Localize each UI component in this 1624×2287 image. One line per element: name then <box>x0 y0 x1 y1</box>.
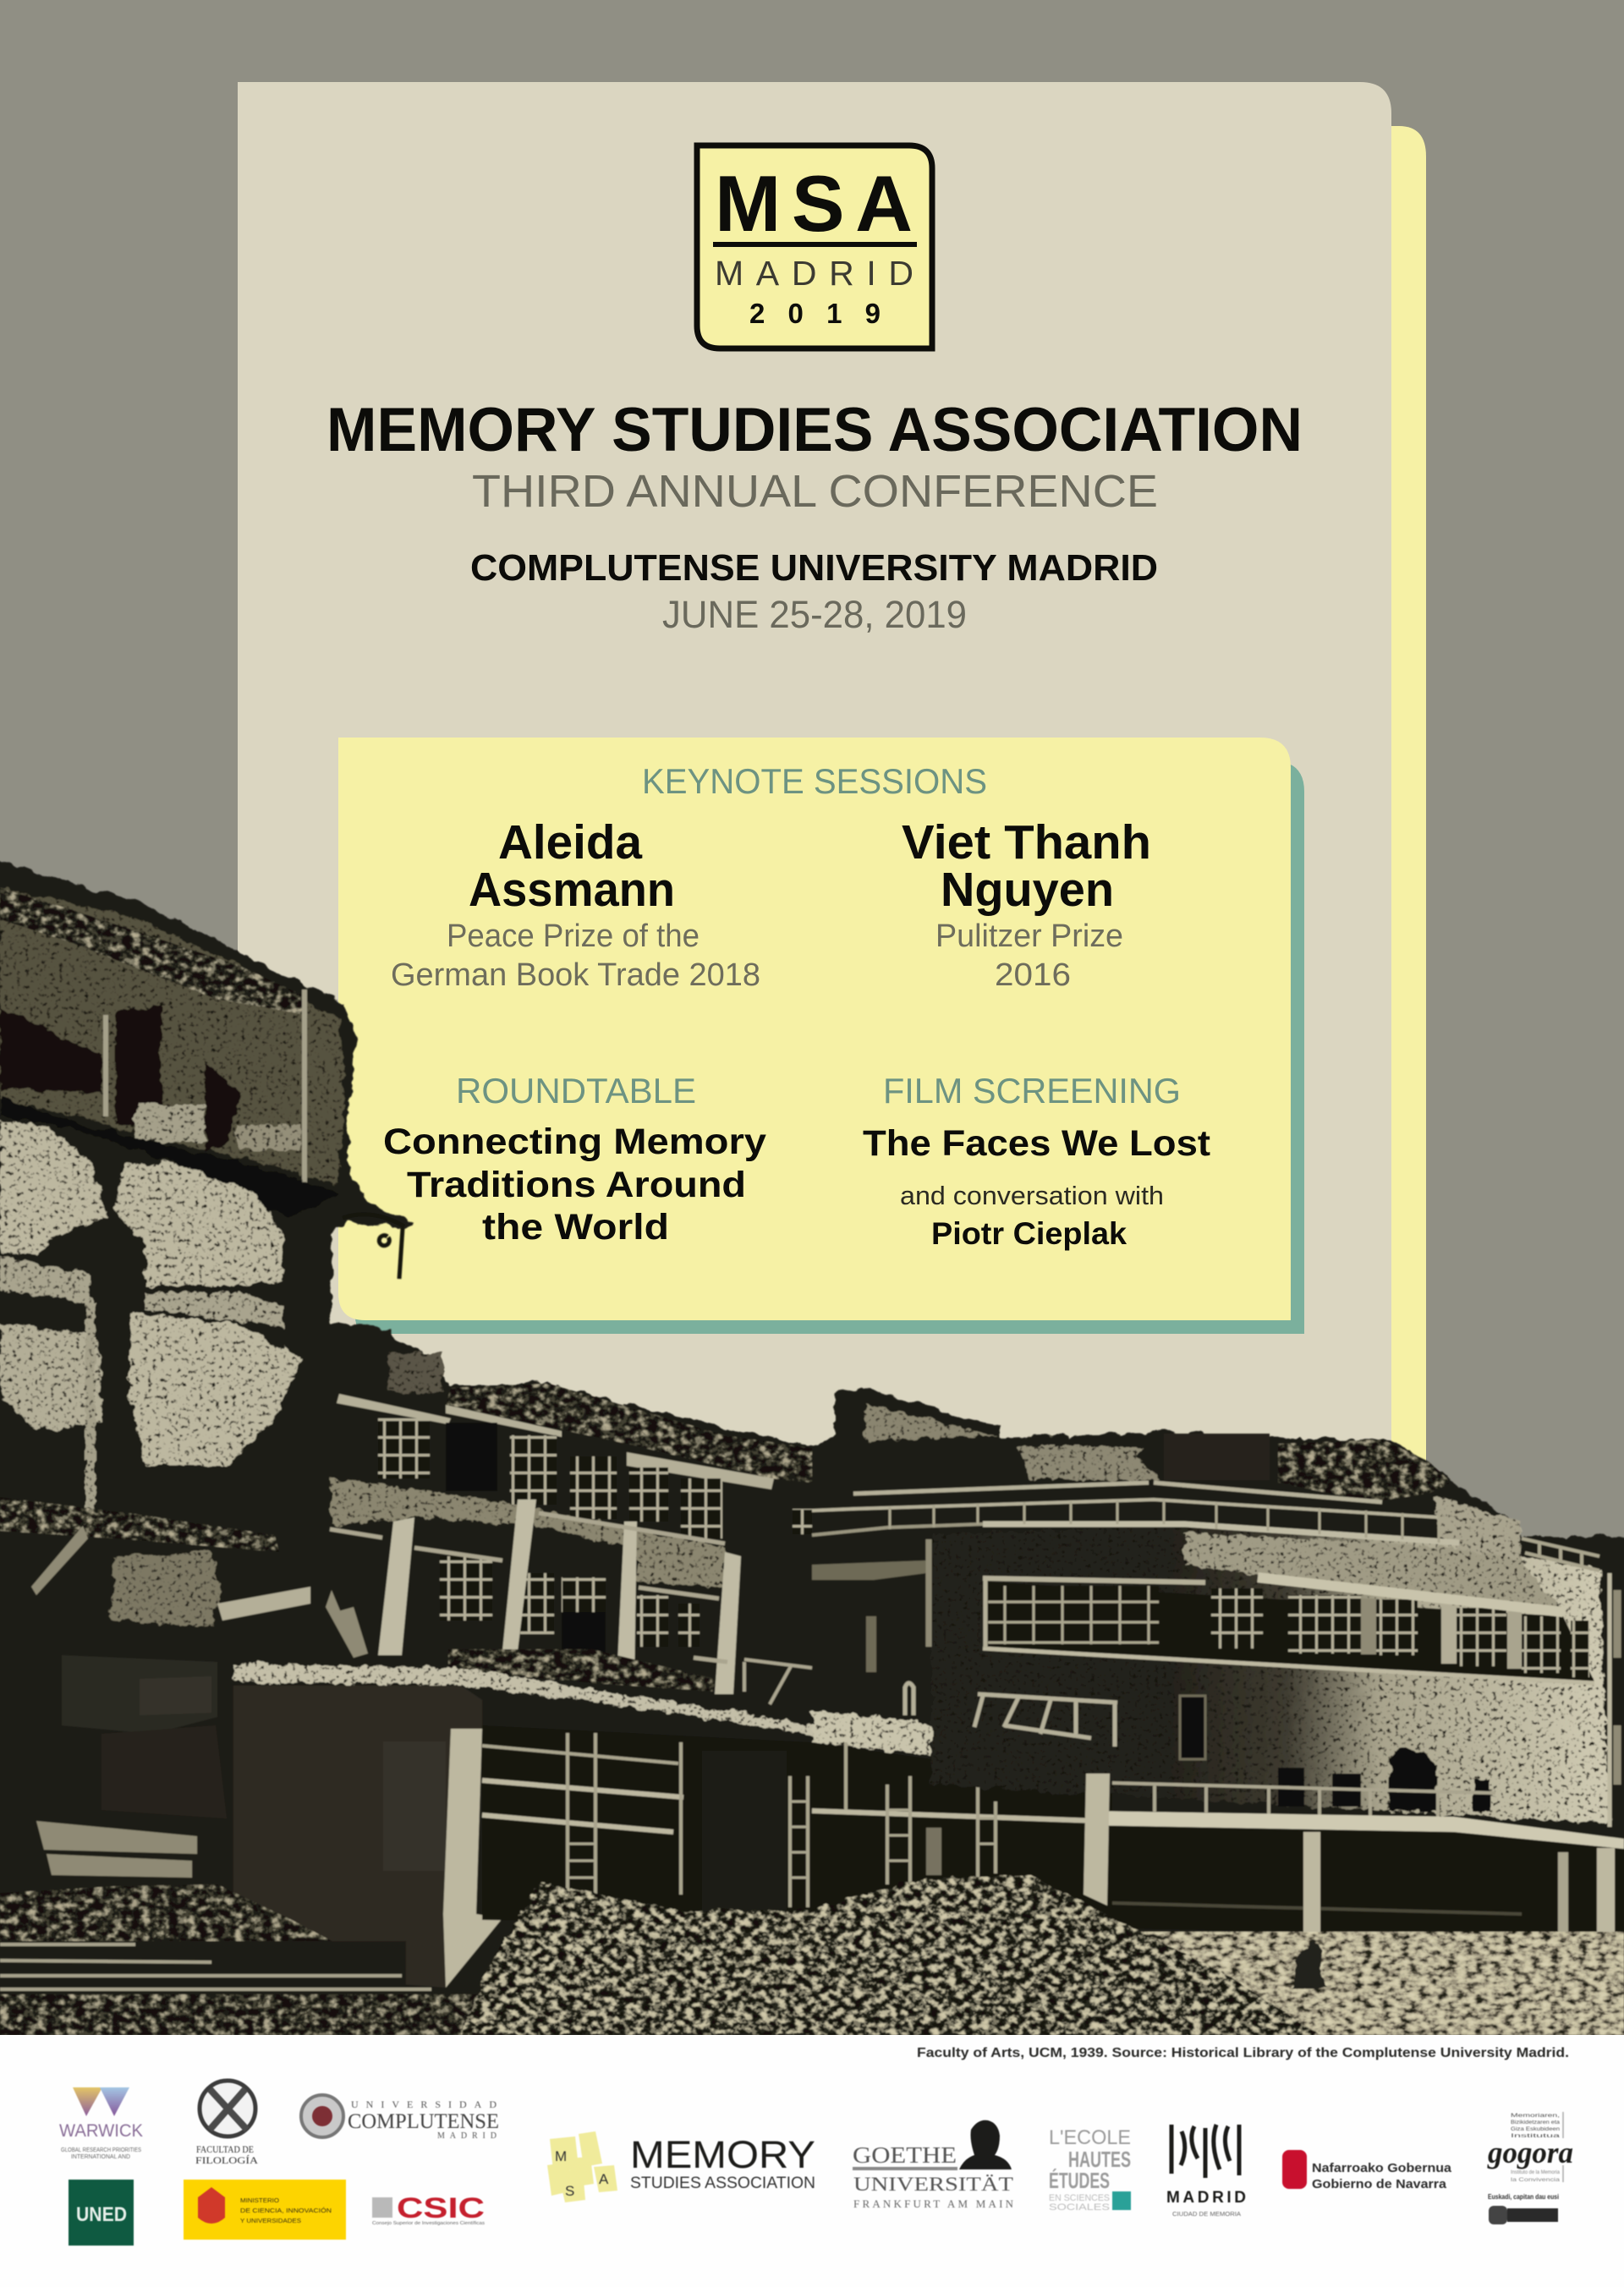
panel shadow <box>355 761 1304 1334</box>
logo: Warwick: GLOBAL RESEARCH PRIORITIES <box>61 2147 141 2153</box>
logo: Spanish ministry: Y UNIVERSIDADES <box>240 2217 301 2224</box>
photo: small rooftop railing <box>905 1683 1117 1747</box>
film screening: FILM SCREENING <box>883 1071 1181 1111</box>
logo: Gobierno de Navarra <box>1282 2150 1452 2191</box>
subtitle: THIRD ANNUAL CONFERENCE <box>472 466 1158 517</box>
logo: Spanish ministry: MINISTERIO <box>240 2197 279 2204</box>
logo: Memory Studies Association: M <box>555 2148 567 2164</box>
logo: Universidad Complutense: COMPLUTENSE <box>348 2110 499 2133</box>
photo: upper ribbon windows <box>812 1483 1617 1827</box>
speaker: Viet Thanh Nguyen: Viet Thanh <box>902 815 1151 869</box>
sticky notes <box>547 2131 617 2202</box>
photo: dark mass left of the tower <box>812 1539 929 1672</box>
yellow back tab <box>1353 126 1426 1522</box>
footer band <box>0 2035 1624 2287</box>
logo: Universidad Complutense: MADRID <box>437 2131 497 2141</box>
logo: EHESS: L'ECOLE <box>1049 2126 1131 2149</box>
film screening: and conversation with <box>900 1181 1164 1210</box>
logo: Goethe University <box>853 2120 1014 2210</box>
speaker: Viet Thanh Nguyen: Pulitzer Prize <box>935 919 1123 954</box>
main beige panel <box>238 82 1391 1607</box>
photo: left rubble mound <box>0 1884 388 1988</box>
logo: UNED <box>69 2180 134 2246</box>
film screening: The Faces We Lost <box>863 1123 1210 1164</box>
photo: roofline <box>866 1405 1519 1560</box>
photo caption: Faculty of Arts, UCM, 1939. Source: Historical Library of the Complutense University Madrid. <box>917 2046 1569 2060</box>
photo: left wing, upper storey <box>0 888 345 1218</box>
heading: keynote sessions: KEYNOTE SESSIONS <box>642 761 987 801</box>
roundtable: Traditions Around <box>407 1165 746 1205</box>
title: MEMORY STUDIES ASSOCIATION <box>326 396 1303 464</box>
MSA Madrid 2019 logo <box>697 145 932 348</box>
photo: ground floor windows and scaffold <box>482 1725 1112 1928</box>
logo: Madrid: MADRID <box>1166 2189 1246 2207</box>
logo: Memory Studies Association: A <box>599 2171 609 2187</box>
logo: Gobierno de Navarra: Gobierno de Navarra <box>1312 2178 1447 2191</box>
logo: Gogora: gogora <box>1487 2136 1573 2169</box>
logo: Madrid: CIUDAD DE MEMORIA <box>1172 2212 1241 2218</box>
logo: Memory Studies Association: MEMORY <box>630 2133 815 2176</box>
photo: canopy over ground floor <box>233 1664 1146 1772</box>
photo: ground and bushes <box>1125 1932 1624 2035</box>
photo: foreground strip <box>0 1994 508 2035</box>
logo: Facultad de Filología: FILOLOGÍA <box>195 2154 258 2166</box>
photo: stone slabs <box>36 1821 197 1878</box>
tower windows <box>988 1586 1589 1677</box>
logo: Gogora <box>1487 2112 1573 2224</box>
logo rule <box>713 242 917 247</box>
logo: Madrid <box>1166 2125 1246 2218</box>
logo: Memory Studies Association: STUDIES ASSOCIATION <box>630 2175 815 2192</box>
logo frame <box>697 145 932 348</box>
photo silhouette <box>0 856 1624 2055</box>
photo: front steps <box>0 1941 431 1996</box>
logo MSA: MSA <box>715 159 913 248</box>
goethe portrait <box>959 2120 1012 2169</box>
logo: Goethe University: GOETHE <box>853 2142 957 2168</box>
logo: CSIC: Consejo Superior de Investigaciones Científicas <box>372 2221 485 2226</box>
logo: Gogora: Bizikidetzaren eta <box>1511 2120 1560 2125</box>
speaker: Aleida Assmann <box>391 815 760 993</box>
logo: EHESS: SOCIALES <box>1049 2202 1110 2213</box>
hanging pipe <box>343 1215 404 1279</box>
dates: JUNE 25-28, 2019 <box>662 593 967 636</box>
logo: Gobierno de Navarra: Nafarroako Gobernua <box>1312 2162 1452 2175</box>
venue: COMPLUTENSE UNIVERSITY MADRID <box>470 547 1158 589</box>
logo: CSIC: CSIC <box>397 2192 485 2224</box>
speaker: Aleida Assmann: Peace Prize of the <box>447 919 700 954</box>
ministry crest <box>198 2187 225 2224</box>
tower shell holes <box>1180 1696 1490 1811</box>
logo: Gogora: Euskadi, capitan dau eusi <box>1488 2192 1559 2201</box>
logo: Facultad de Filología: FACULTAD DE <box>196 2143 254 2155</box>
photo: ruined Faculty of Arts building <box>0 856 1624 2055</box>
speaker: Aleida Assmann: Assmann <box>469 863 675 917</box>
logo year: 2019 <box>749 298 881 329</box>
logo: Universidad Complutense: UNIVERSIDAD <box>351 2098 497 2110</box>
logo: Memory Studies Association: S <box>565 2183 574 2199</box>
logo: EHESS: HAUTES <box>1068 2147 1131 2172</box>
logo: Gogora: Instituto de la Memoria <box>1511 2169 1560 2175</box>
speaker: Viet Thanh Nguyen: 2016 <box>995 957 1071 993</box>
logo: Gogora: Institutua <box>1511 2133 1561 2139</box>
logo: Spanish ministry <box>184 2180 346 2240</box>
logo: Gogora: Memoriaren, <box>1511 2113 1560 2119</box>
speaker: Aleida Assmann: Aleida <box>498 815 643 869</box>
roundtable: the World <box>482 1207 669 1248</box>
roundtable <box>383 1071 766 1248</box>
speaker: Viet Thanh Nguyen: Nguyen <box>941 863 1114 917</box>
wall piers <box>378 1500 741 1694</box>
logo: EHESS: EN SCIENCES <box>1049 2193 1110 2203</box>
photo: middle wing, two storeys of windows <box>330 1353 812 1704</box>
photo: workman <box>1292 1940 1328 1988</box>
logo: CSIC <box>372 2192 485 2226</box>
logo: Warwick: WARWICK <box>59 2121 143 2141</box>
logo: EHESS: ÉTUDES <box>1049 2168 1110 2193</box>
photo: central rubble mound <box>461 1875 1320 2035</box>
logo: UNED: UNED <box>76 2203 127 2226</box>
logo: Facultad de Filología <box>195 2081 258 2166</box>
speaker: Aleida Assmann: German Book Trade 2018 <box>391 957 760 993</box>
logo: Warwick <box>59 2087 143 2160</box>
speaker: Viet Thanh Nguyen <box>902 815 1151 993</box>
photo: concrete block and pillar <box>233 1686 502 1988</box>
logo: Memory Studies Association <box>547 2131 815 2202</box>
roundtable: Connecting Memory <box>383 1122 766 1162</box>
logo: Gogora: la Convivencia <box>1511 2177 1561 2183</box>
logo: EHESS <box>1049 2126 1131 2213</box>
logo: Warwick: INTERNATIONAL AND <box>71 2154 130 2160</box>
logo: Gogora: Giza Eskubideen <box>1511 2126 1560 2132</box>
upper windows <box>378 1418 812 1538</box>
photo: circular drum tower <box>931 1522 1610 1824</box>
logo: Goethe University: UNIVERSITÄT <box>853 2174 1013 2195</box>
photo: balcony slab and colonnade <box>1084 1774 1624 1943</box>
logo: Universidad Complutense <box>301 2095 499 2141</box>
keynote panel <box>338 738 1304 1334</box>
logo Madrid: MADRID <box>715 254 914 293</box>
film screening <box>863 1071 1210 1251</box>
lower windows <box>440 1556 700 1663</box>
photo: left wing, scorched wall <box>0 1120 366 1818</box>
logo: Goethe University: FRANKFURT AM MAIN <box>853 2197 1014 2210</box>
logo: Spanish ministry: DE CIENCIA, INNOVACIÓN <box>240 2207 332 2214</box>
roundtable: ROUNDTABLE <box>456 1071 696 1111</box>
panel face <box>338 738 1291 1320</box>
film screening: Piotr Cieplak <box>931 1216 1127 1251</box>
